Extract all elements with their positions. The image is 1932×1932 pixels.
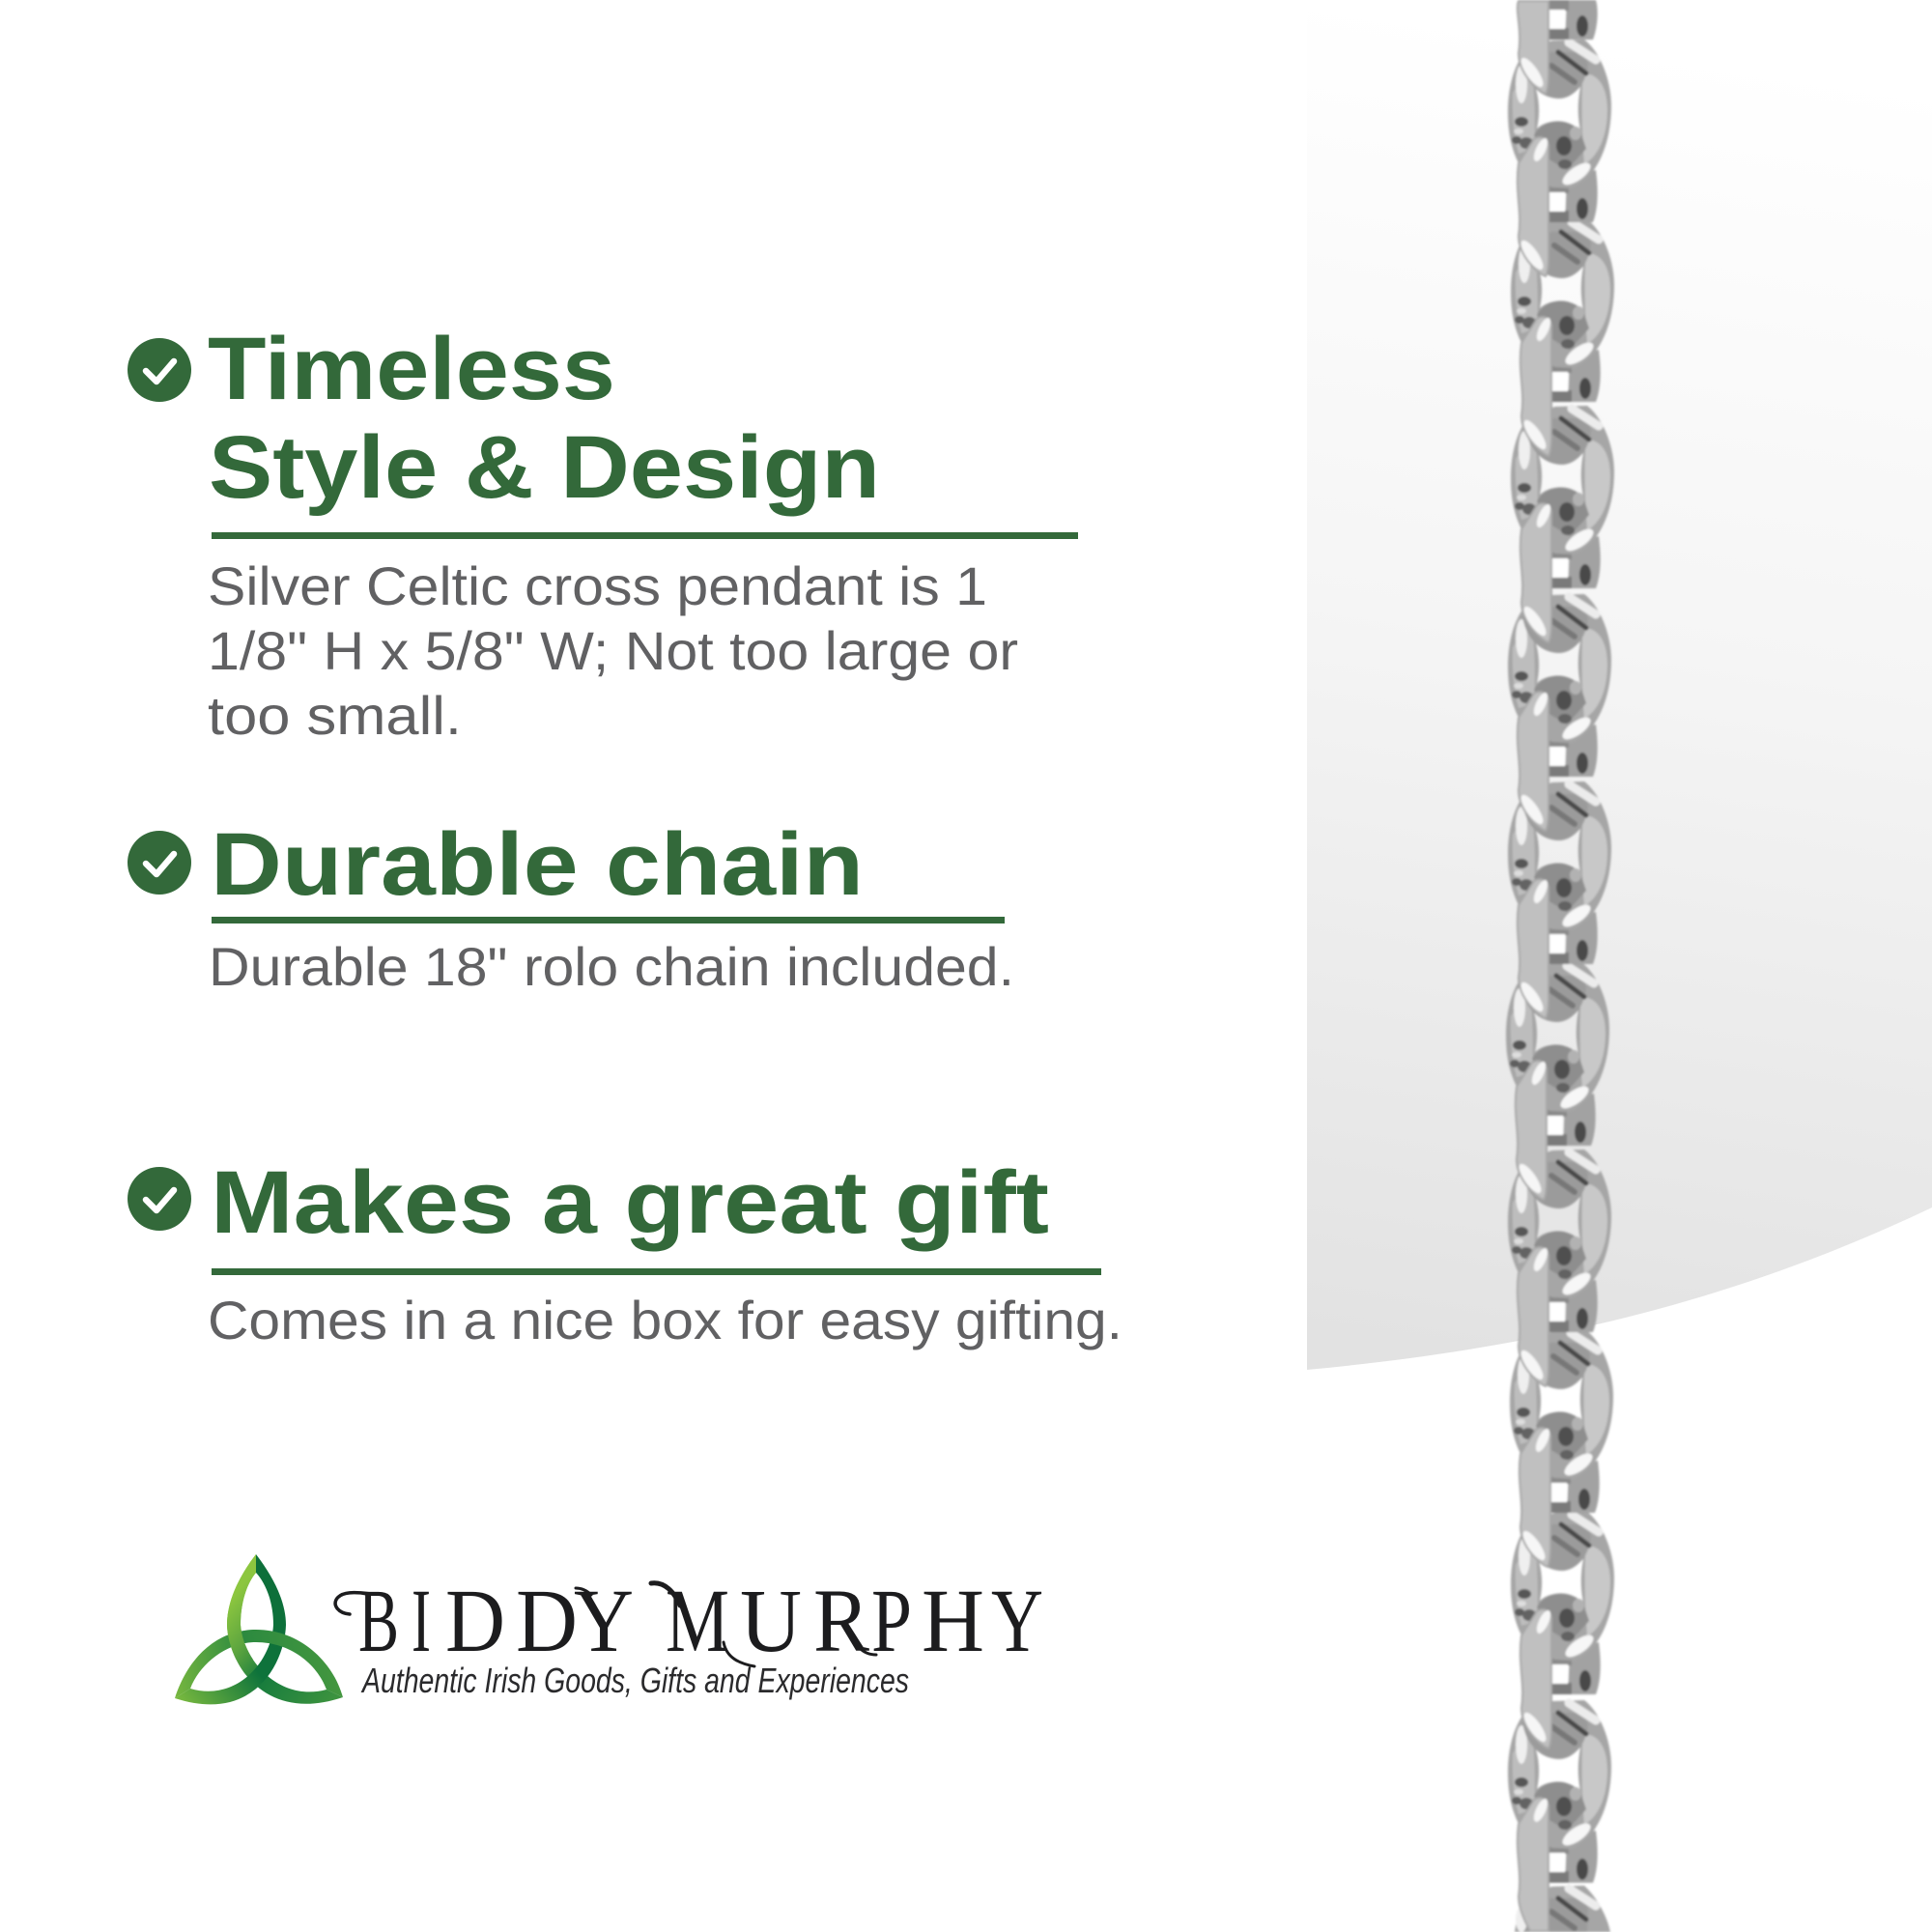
brand name: H xyxy=(922,1572,984,1671)
heading: timeless style and design: Timeless xyxy=(208,320,615,418)
brand name: D xyxy=(445,1572,505,1671)
brand name: Y xyxy=(574,1572,634,1671)
heading: makes a great gift: Makes a great gift xyxy=(211,1153,1049,1252)
background panel xyxy=(1307,0,1932,1370)
feature: timeless style and design xyxy=(128,320,1078,746)
heading: durable chain: Durable chain xyxy=(211,815,864,914)
body text: pendant size: Silver Celtic cross pendant is 1 xyxy=(208,555,987,616)
feature: durable chain xyxy=(128,815,1014,997)
brand name swashes xyxy=(335,1583,876,1666)
brand name: B xyxy=(358,1572,399,1671)
body text: pendant size: 1/8" H x 5/8" W; Not too large or xyxy=(208,620,1018,681)
heading: timeless style and design xyxy=(208,320,880,517)
brand name: I xyxy=(412,1572,431,1671)
icon: check badge xyxy=(128,1167,191,1231)
brand name: D xyxy=(516,1572,578,1671)
icon: check badge xyxy=(128,831,191,895)
icon: green trinity knot xyxy=(175,1554,343,1704)
brand name xyxy=(358,1572,1043,1671)
brand name: P xyxy=(871,1572,912,1671)
heading rule xyxy=(212,532,1078,539)
body text: chain length: Durable 18" rolo chain included. xyxy=(209,936,1014,997)
tagline: Authentic Irish Goods, Gifts and Experiences xyxy=(360,1661,909,1700)
body text: pendant size xyxy=(208,555,1018,746)
heading rule xyxy=(212,1268,1101,1275)
logo: Biddy Murphy xyxy=(175,1554,1043,1704)
chain photo xyxy=(1506,0,1614,1932)
icon: check badge xyxy=(128,338,191,402)
brand name: R xyxy=(813,1572,869,1671)
heading rule xyxy=(212,917,1005,923)
feature: makes a great gift xyxy=(128,1153,1122,1350)
heading: timeless style and design: Style & Design xyxy=(209,418,880,517)
body text: pendant size: too small. xyxy=(208,685,462,746)
body text: gift box: Comes in a nice box for easy gifting. xyxy=(208,1290,1122,1350)
brand name: U xyxy=(740,1572,802,1671)
brand name: M xyxy=(666,1572,729,1671)
brand name: Y xyxy=(991,1572,1043,1671)
